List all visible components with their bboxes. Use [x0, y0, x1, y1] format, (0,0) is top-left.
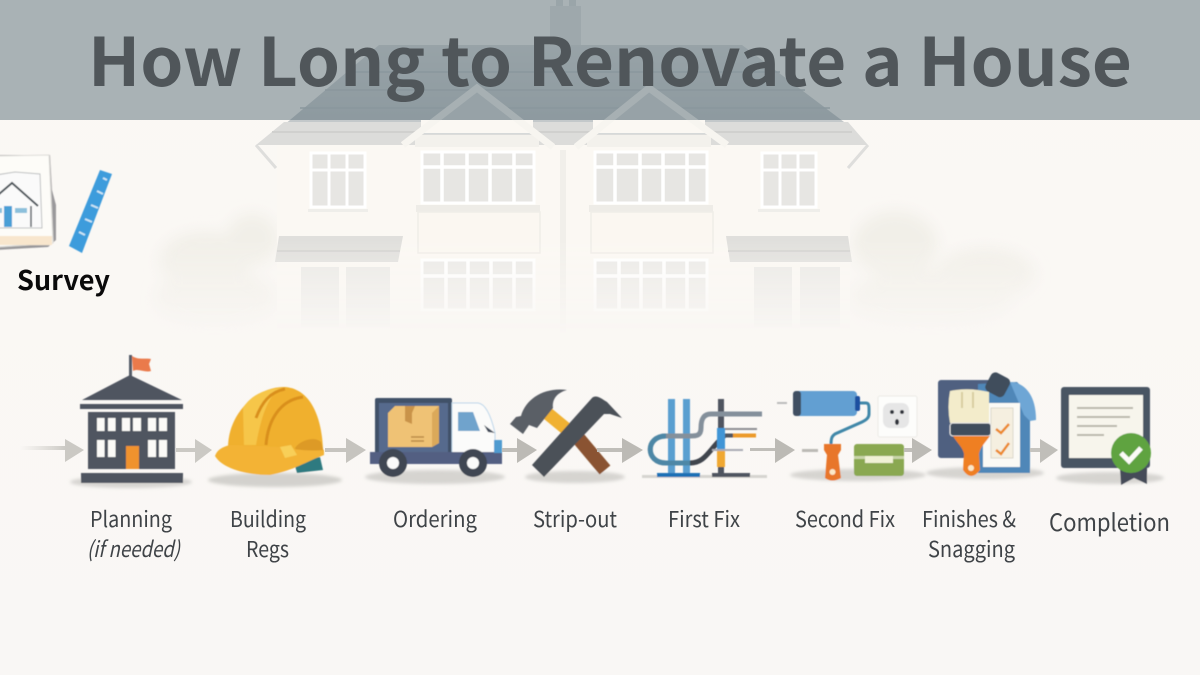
label: building: Building [230, 502, 307, 534]
title: How Long to Renovate a House [88, 9, 1132, 106]
icon: survey plan [0, 155, 56, 250]
step: finishes and snagging [922, 371, 1044, 564]
arrow: building regs to ordering [325, 438, 366, 463]
arrow: strip-out to first fix [597, 438, 643, 463]
label: if needed: (if needed) [87, 532, 181, 564]
label: finishes: Finishes & [922, 502, 1016, 534]
arrow: planning to building regs [176, 439, 212, 463]
label: first fix: First Fix [668, 502, 740, 534]
header band [0, 0, 1200, 120]
icon: certificate with badge [1056, 387, 1164, 485]
label: regs: Regs [246, 532, 289, 564]
icon: spirit level [69, 170, 112, 253]
upper bay window left [416, 152, 540, 212]
porch roofs [275, 236, 852, 262]
arrow: ordering to strip-out [502, 438, 537, 463]
lower bay window left [420, 258, 536, 288]
label: strip-out: Strip-out [533, 502, 617, 534]
icon: brush, overalls and checklist [926, 371, 1044, 479]
arrow: second fix to finishes [904, 438, 932, 463]
chimney [550, 0, 581, 56]
icon: hard hat [208, 387, 342, 487]
background house illustration [166, 0, 1024, 290]
step: ordering [365, 398, 505, 534]
porch doors [301, 267, 840, 290]
upper side window left [308, 153, 368, 212]
survey step [0, 155, 112, 298]
trees behind the house [166, 215, 1024, 276]
step: second fix [777, 391, 926, 534]
icon: town hall [70, 355, 192, 488]
step: completion [1049, 387, 1170, 538]
arrow: survey to planning [20, 439, 84, 462]
right gable [576, 88, 727, 147]
walls [239, 408, 1126, 434]
icon: delivery truck [365, 398, 505, 484]
icon: hammer and crowbar [510, 390, 625, 483]
icon: pipes and wiring [642, 399, 767, 478]
icon: paint roller, socket and tin [777, 391, 926, 481]
left gable [403, 88, 553, 147]
bay panels [418, 212, 713, 253]
upper side window right [758, 153, 820, 212]
step: first fix [642, 399, 767, 534]
lower bay window right [594, 258, 708, 288]
label: ordering: Ordering [393, 502, 478, 534]
step: planning [70, 355, 192, 564]
arrow: first fix to second fix [750, 438, 795, 463]
step: building regs [208, 387, 342, 564]
survey label: Survey [17, 259, 110, 298]
label: completion: Completion [1049, 503, 1170, 538]
label: second fix: Second Fix [795, 502, 895, 534]
label: planning: Planning [90, 502, 173, 534]
party wall [560, 150, 566, 257]
label: snagging: Snagging [928, 532, 1016, 564]
step: strip-out [510, 390, 625, 534]
roof [256, 45, 868, 168]
upper bay window right [589, 152, 713, 212]
arrow: finishes to completion [1030, 439, 1058, 463]
